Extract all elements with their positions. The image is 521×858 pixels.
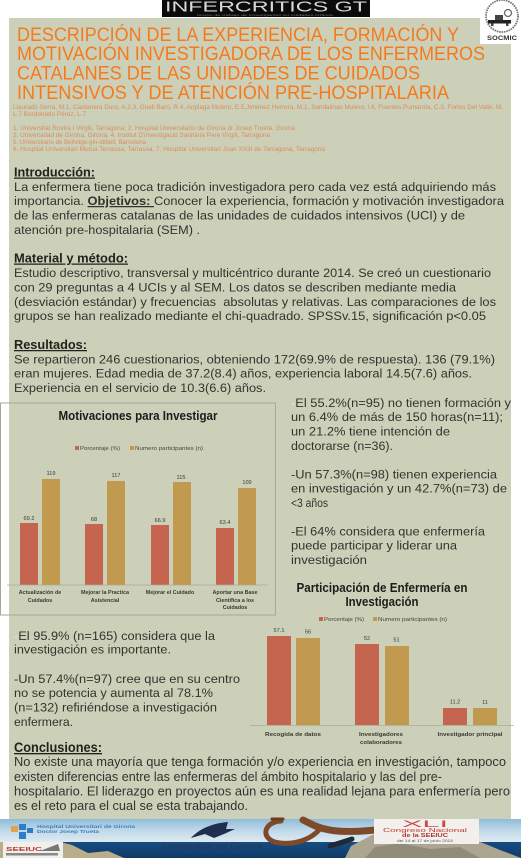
sculpture <box>266 819 375 846</box>
legend <box>319 617 447 623</box>
text: introducción y objetivos: La enfermera tiene poca tradición investigadora pero cada vez está adquiriendo más <box>14 180 496 194</box>
text: formación y experiencia: investigación <box>291 553 367 567</box>
affiliations: 3. Universidad de Girona, Girona; 4. Institut D'investigació Sanitària Pere Virgili, Tarragona <box>13 132 270 139</box>
section: material y método <box>14 252 496 323</box>
affiliations <box>13 125 325 153</box>
text: conclusiones: No existe una mayoría que tenga formación y/o experiencia en investigación, tampoco <box>14 754 506 769</box>
logo: congreso SEEIUC: XLI <box>402 819 448 829</box>
chart title: Motivaciones para Investigar <box>58 409 218 423</box>
data labels: 117 <box>112 473 120 479</box>
text: importancia de la investigación: -Un 57.4%(n=97) cree que en su centro <box>14 672 240 686</box>
text: material y método: con 29 preguntas a 4 UCIs y al SEM. Los datos se describen mediante media <box>14 280 456 294</box>
section: introducción <box>14 166 504 237</box>
data labels: 57.1 <box>274 628 284 634</box>
footer banner <box>0 819 521 858</box>
text: formación y experiencia: <3 años <box>291 496 328 510</box>
title <box>17 23 485 104</box>
text: formación y experiencia: en investigación y un 42.7%(n=73) de <box>291 482 507 496</box>
bar chart: participación de enfermería en investigación <box>250 581 514 746</box>
category labels: Científica a los <box>216 598 254 604</box>
data labels: 66.9 <box>155 518 165 524</box>
text: conclusiones <box>14 754 510 813</box>
text: formación y experiencia <box>291 396 512 567</box>
text: importancia de la investigación: (n=132) refiriéndose a investigación <box>14 700 217 714</box>
data labels: 119 <box>47 471 55 477</box>
text: importancia de la investigación: enfermera. <box>14 715 73 729</box>
category labels: Cuidados <box>223 605 247 611</box>
text: formación y experiencia: -Un 57.3%(n=98) tienen experiencia <box>291 468 497 482</box>
text: material y método: Estudio descriptivo, transversal y multicéntrico durante 2014. Se creó un cuestionario <box>14 266 491 280</box>
logo: Universitat de Girona <box>163 822 263 852</box>
category labels: Actualización de <box>19 590 61 596</box>
text: formación y experiencia: un 21.2% tiene intención de <box>291 424 450 438</box>
text: introducción y objetivos: de las enfermeras catalanas de las unidades de cuidados intensivos (UCI) y de <box>14 208 465 222</box>
text: formación y experiencia: un 6.4% de más de 150 horas(n=11); <box>291 410 503 424</box>
rocks right <box>345 833 521 858</box>
bars <box>250 636 514 726</box>
data labels: 69.2 <box>24 516 34 522</box>
logo: SEEIUC <box>3 842 63 858</box>
text: importancia de la investigación: investigación es importante. <box>14 642 171 656</box>
category labels: Cuidados <box>28 598 52 604</box>
text: introducción y objetivos: importancia. Objetivos: Conocer la experiencia, formación y motivación investigadora <box>14 194 504 208</box>
bar chart: motivaciones para investigar <box>0 403 276 615</box>
data labels: 115 <box>177 475 185 481</box>
data labels: 11.2 <box>450 700 460 706</box>
data labels: 11 <box>482 700 488 706</box>
category labels: Investigadores <box>359 732 403 738</box>
data labels: 52 <box>364 636 370 642</box>
text: conclusiones: existen diferencias entre las enfermeras del ámbito hospitalario y las del pre- <box>14 769 442 784</box>
legend <box>75 446 203 452</box>
heading: conclusiones: Conclusiones: <box>14 740 102 755</box>
category labels: Aportar una Base <box>213 590 257 596</box>
category labels: Recogida de datos <box>265 732 321 738</box>
heading: introducción: Introducción: <box>14 166 95 180</box>
section: resultados <box>14 338 495 395</box>
logo: congreso SEEIUC: de la SEEIUC <box>402 833 449 839</box>
category labels <box>19 590 257 611</box>
legend: Numero participantes (n) <box>378 617 447 623</box>
logo: SOCMIC: SOCMIC <box>487 36 518 42</box>
affiliations: 5. Universitario de Bellvitge-gin-idibell, Barcelona <box>13 139 146 146</box>
text: formación y experiencia: doctorarse (n=36). <box>291 439 393 453</box>
category labels: Asistencial <box>91 598 120 604</box>
heading: resultados: Resultados: <box>14 338 87 352</box>
text: introducción y objetivos: atención pre-hospitalaria (SEM) . <box>14 223 200 237</box>
text: resultados: Se repartieron 246 cuestionarios, obteniendo 172(69.9% de respuesta). 136 (79.1%) <box>14 352 495 366</box>
data labels: 109 <box>242 480 252 486</box>
text: formación y experiencia: -El 55.2%(n=95) no tienen formación y <box>291 396 512 410</box>
text: material y método: grupos se han realizado mediante el chi-quadrado. SPSSv.15, significación p<0.05 <box>14 309 486 323</box>
heading: material y método: Material y método: <box>14 252 128 266</box>
data labels: 56 <box>305 630 311 636</box>
text: material y método: (desviación estándar) y frecuencias absolutas y relativas. Las comparaciones de los <box>14 295 496 309</box>
text: material y método <box>14 266 496 323</box>
data labels <box>274 628 488 706</box>
logo: Universitat de Girona: Universitat de Girona <box>163 841 263 852</box>
text: importancia de la investigación <box>14 629 240 729</box>
title: DESCRIPCIÓN DE LA EXPERIENCIA, FORMACIÓN Y <box>17 23 459 46</box>
legend: Porcentaje (%) <box>80 446 120 452</box>
authors: Llauradó Serra, M.1, Castanera Duro, A.2,3, Güell Baró, R.4, Argilaga Molero, E.5,Jiménez Herrera, M.1, Sandalinas Mulero, I.6, Fuentes Pumarola, C.3, Fortes Del Valle, M. <box>13 104 503 111</box>
chart title: Participación de Enfermería en <box>296 581 468 595</box>
data labels: 68 <box>91 517 97 523</box>
text: resultados <box>14 352 495 395</box>
text: conclusiones: hospitalario. El liderazgo en proyectos aún es una realidad lejana para enfermería pero <box>14 784 510 798</box>
data labels <box>24 471 252 526</box>
category labels <box>265 732 503 746</box>
header banner: Infercritics GT <box>162 0 370 17</box>
hospital logo: Hospital Universitari de Girona <box>37 824 136 829</box>
category labels: Investigador principal <box>438 732 503 738</box>
section: conclusiones <box>14 740 510 813</box>
chart title <box>296 581 468 609</box>
authors: L.7 Bordonado Pérez, L.7 <box>13 111 86 118</box>
chart title: Investigación <box>346 595 418 609</box>
text: conclusiones: es el reto para el cual se esta trabajando. <box>14 798 248 813</box>
logo: congreso SEEIUC: Congreso Nacional <box>383 828 467 834</box>
bars <box>7 479 268 585</box>
rock left <box>0 842 124 858</box>
affiliations: 6. Hospital Universitari Mutua Terrassa, Tarrassa; 7. Hospital Universitari Joan XXIII de Tarragona, Tarragona <box>13 146 325 153</box>
header banner: Infercritics GT: Grupo de trabajo de investigación en cuidados críticos <box>197 13 334 17</box>
text: introducción y objetivos <box>14 180 504 237</box>
text: resultados: eran mujeres. Edad media de 37.2(8.4) años, experiencia laboral 14.5(7.6) años. <box>14 366 472 380</box>
title: MOTIVACIÓN INVESTIGADORA DE LOS ENFERMEROS <box>17 42 485 65</box>
logo: congreso SEEIUC: del 14 al 17 de junio 2015 <box>397 838 454 843</box>
text: importancia de la investigación: no se potencia y aumenta al 78.1% <box>14 686 213 700</box>
text: importancia de la investigación: -El 95.9% (n=165) considera que la <box>14 629 215 643</box>
hospital logo <box>11 824 136 839</box>
data labels: 51 <box>393 638 400 644</box>
hospital logo: Doctor Josep Trueta <box>37 829 100 834</box>
text: formación y experiencia: -El 64% considera que enfermería <box>291 524 485 538</box>
logo: SOCMIC <box>480 0 521 44</box>
authors <box>13 104 503 118</box>
logo: congreso SEEIUC <box>374 819 479 844</box>
data labels: 63.4 <box>220 520 230 526</box>
legend: Numero participantes (n) <box>135 446 203 452</box>
text: resultados: Experiencia en el servicio de 10.3(6.6) años. <box>14 381 266 395</box>
category labels: colaboradores <box>360 740 402 746</box>
category labels: Mejorar el Cuidado <box>146 590 195 596</box>
title: INTENSIVOS Y DE ATENCIÓN PRE-HOSPITALARIA <box>17 81 449 104</box>
title: CATALANES DE LAS UNIDADES DE CUIDADOS <box>17 62 420 84</box>
affiliations: 1. Universitat Rovira I Virgili, Tarragona; 2. Hospital Universitario de Girona dr Josep Trueta, Girona <box>13 125 295 132</box>
text: formación y experiencia: puede participar y liderar una <box>291 538 457 552</box>
logo: SEEIUC: SEEIUC <box>6 847 42 853</box>
category labels: Mejorar la Practica <box>81 590 130 596</box>
legend: Porcentaje (%) <box>324 617 364 623</box>
